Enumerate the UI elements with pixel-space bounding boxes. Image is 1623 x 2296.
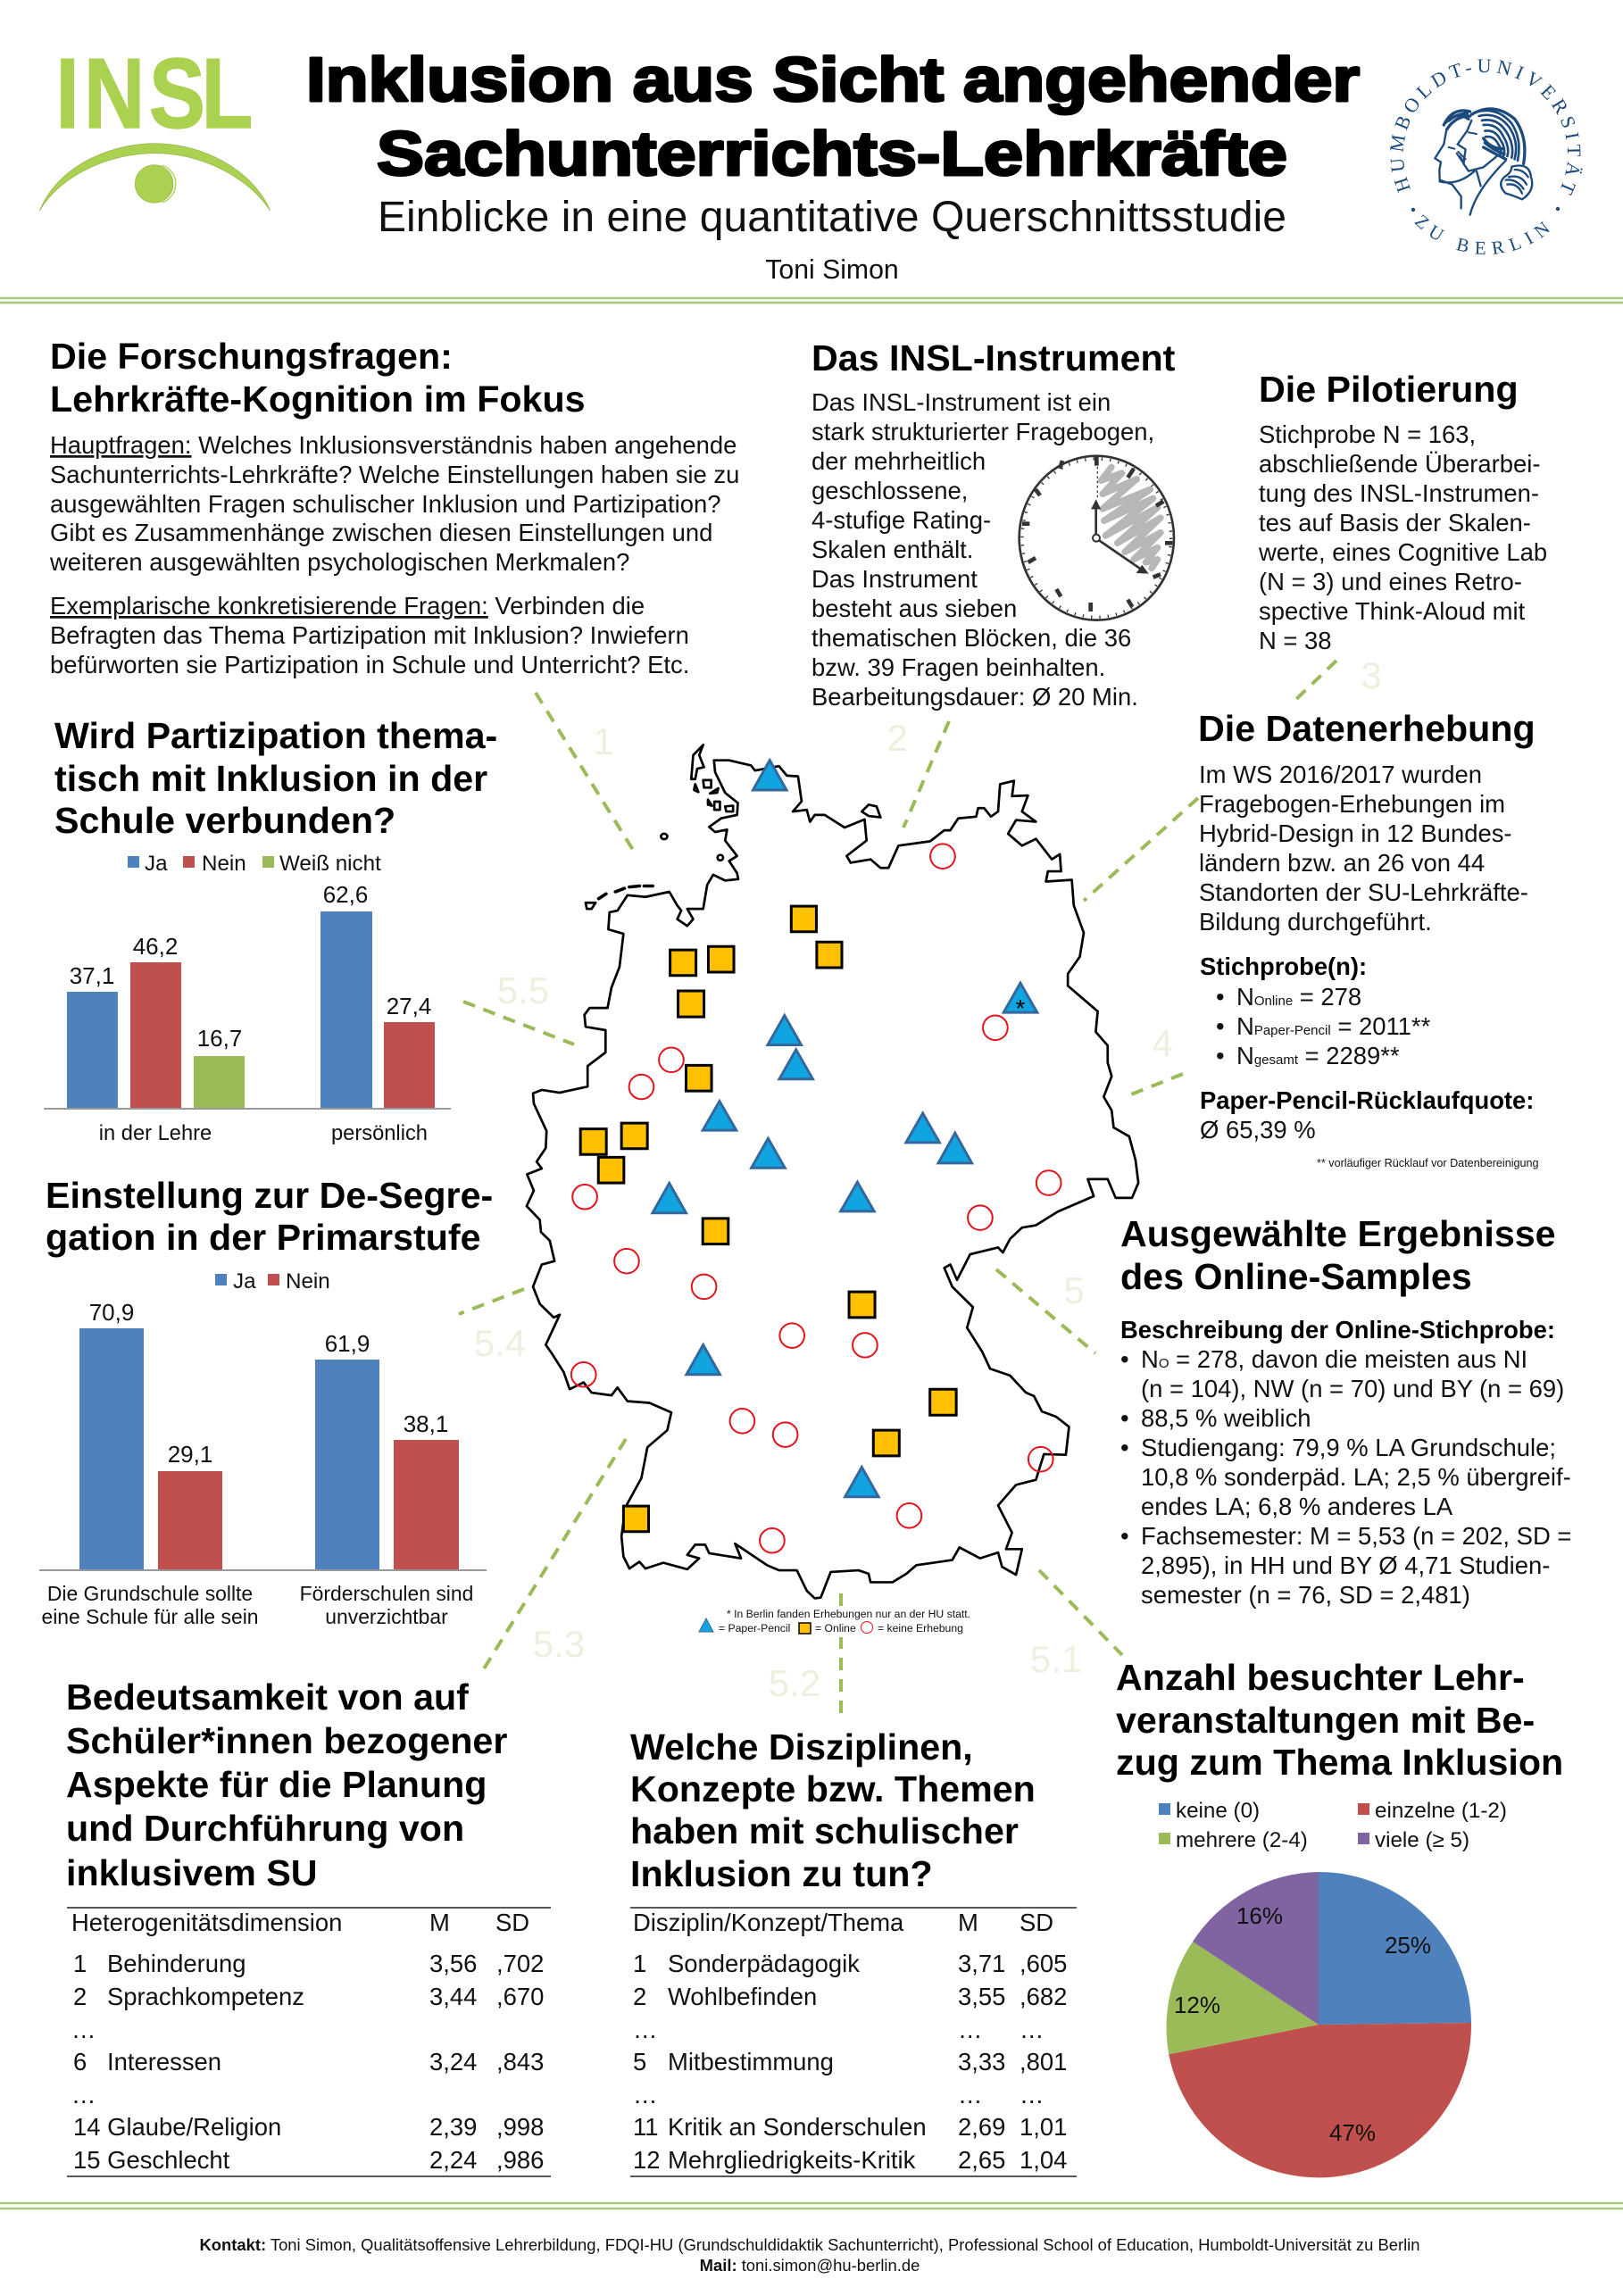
footer: contact: Mail: toni.simon@hu-berlin.de (700, 2256, 920, 2275)
text: Stichprobenbeschreibung: Studiengang: 79,9 % LA Grundschule; (1141, 1434, 1556, 1461)
table: 3,55 (958, 1983, 1005, 2010)
footer: contact (200, 2235, 1419, 2275)
panel: Pilotierung (1258, 369, 1547, 654)
panel: Ausgewählte Ergebnisse (1120, 1213, 1571, 1609)
text: Instrument: 4-stufige Rating- (812, 506, 991, 534)
heading: Ergebnisse: Ausgewählte Ergebnisse (1120, 1213, 1556, 1254)
heading: Bedeutsamkeit: und Durchführung von (66, 1808, 464, 1849)
text: Stichprobenbeschreibung: • (1120, 1345, 1129, 1373)
table: 3,56 (429, 1950, 477, 1977)
table: Sprachkompetenz (107, 1983, 304, 2010)
pie chart (1167, 1872, 1471, 2177)
text: Pilotierung: (N = 3) und eines Retro- (1259, 568, 1522, 595)
leader lines and section numbers: 5.1 (1030, 1638, 1082, 1680)
text: Datenerhebung: Fragebogen-Erhebungen im (1199, 790, 1505, 818)
title: Inklusion aus Sicht angehender (306, 45, 1360, 114)
heading: De-Segregation: Einstellung zur De-Segre- (46, 1175, 493, 1216)
panel: Forschungsfragen (49, 336, 739, 678)
bar chart: 16,7 (197, 1025, 242, 1052)
table: Behinderung (107, 1950, 246, 1977)
table: … (958, 2016, 982, 2043)
text: Stichprobe: NPaper-Pencil = 2011** (1236, 1012, 1431, 1040)
text: Instrument: Das INSL-Instrument ist ein (812, 388, 1111, 416)
text: Instrument: Das Instrument (812, 565, 978, 593)
text: Stichprobe: • (1216, 1012, 1225, 1040)
logo: Humboldt-Universität seal (1390, 59, 1583, 254)
bar chart: eine Schule für alle sein (41, 1605, 259, 1628)
heading: Forschungsfragen: Die Forschungsfragen: (50, 336, 453, 377)
text: Stichprobe: Ngesamt = 2289** (1236, 1042, 1400, 1069)
table: M (429, 1909, 450, 1936)
bar chart: 61,9 (325, 1330, 370, 1357)
table: SD (1020, 1909, 1053, 1936)
table: Mehrgliedrigkeits-Kritik (668, 2146, 916, 2174)
bar chart: Förderschulen sind (300, 1582, 473, 1605)
table: ,682 (1020, 1983, 1067, 2010)
table: 1 (73, 1950, 87, 1977)
table: M (958, 1909, 978, 1936)
table: 2,39 (429, 2113, 477, 2141)
table: 11 (633, 2113, 658, 2141)
panel: Anzahl Lehrveranstaltungen (1116, 1657, 1563, 2177)
text: Instrument: thematischen Blöcken, die 36 (812, 624, 1131, 652)
bar chart: 29,1 (168, 1441, 212, 1468)
heading: Disziplinen: Welche Disziplinen, (630, 1726, 973, 1768)
leader lines and section numbers: 5.2 (769, 1662, 820, 1704)
table: 14 Glaube/Religion (73, 2113, 281, 2141)
heading: De-Segregation: gation in der Primarstufe (46, 1217, 480, 1258)
table: ,702 (496, 1950, 544, 1977)
heading: Forschungsfragen: Lehrkräfte-Kognition im Fokus (50, 379, 586, 420)
pie chart: 47% (1329, 2119, 1376, 2146)
leader lines and section numbers: 2 (886, 717, 908, 759)
bar chart: 70,9 (89, 1299, 134, 1326)
table: ,605 (1020, 1950, 1067, 1977)
map legend: * In Berlin fanden Erhebungen nur an der HU statt. (727, 1608, 970, 1620)
table: 2,65 (958, 2146, 1005, 2174)
text: Hauptfragen: Sachunterrichts-Lehrkräfte? Welche Einstellungen haben sie zu (50, 461, 739, 488)
text: Instrument: bzw. 39 Fragen beinhalten. (812, 653, 1105, 681)
text: Pilotierung: N = 38 (1259, 627, 1332, 654)
text: Stichprobenbeschreibung: 2,895), in HH und BY Ø 4,71 Studien- (1141, 1551, 1550, 1579)
legend (215, 1269, 330, 1294)
text: Stichprobenbeschreibung: 88,5 % weiblich (1141, 1404, 1311, 1432)
bar chart: unverzichtbar (325, 1605, 448, 1628)
text: Pilotierung: Stichprobe N = 163, (1259, 420, 1476, 448)
map of Germany with survey sites (527, 745, 1138, 1598)
leader lines and section numbers: 5.3 (533, 1623, 585, 1665)
text: Stichprobe (1200, 953, 1431, 1069)
pie chart: 25% (1385, 1932, 1431, 1959)
legend: Nein (202, 852, 246, 876)
text: Instrument: Skalen enthält. (812, 536, 973, 563)
heading: Anzahl: Anzahl besuchter Lehr- (1116, 1657, 1525, 1698)
heading: Bedeutsamkeit: Aspekte für die Planung (66, 1764, 487, 1805)
pie chart: 16% (1236, 1902, 1283, 1929)
text: Stichprobenbeschreibung: NO = 278, davon die meisten aus NI (1141, 1345, 1527, 1373)
text: Stichprobenbeschreibung: • (1120, 1434, 1129, 1461)
map legend (699, 1607, 978, 1637)
table (67, 1908, 551, 2176)
online sites (squares) (580, 906, 956, 1532)
heading: Bedeutsamkeit: Schüler*innen bezogener (66, 1720, 507, 1761)
text: Instrument: besteht aus sieben (812, 595, 1017, 622)
legend: Weiß nicht (279, 852, 381, 876)
map legend: = keine Erhebung (878, 1622, 963, 1635)
table: ,670 (496, 1983, 544, 2010)
legend: viele (≥ 5) (1375, 1828, 1469, 1852)
table: 1,01 (1020, 2113, 1067, 2141)
text: konkretisierende Fragen: Exemplarische konkretisierende Fragen: Verbinden die (50, 592, 645, 620)
text: Hauptfragen: ausgewählten Fragen schulischer Inklusion und Partizipation? (50, 490, 721, 518)
table: 3,33 (958, 2048, 1005, 2076)
table: Kritik an Sonderschulen (668, 2113, 927, 2141)
table: Wohlbefinden (668, 1983, 817, 2010)
table (630, 1908, 1077, 2176)
table: 3,44 (429, 1983, 477, 2010)
text: Datenerhebung: ländern bzw. an 26 von 44 (1199, 849, 1485, 877)
table: 5 (633, 2048, 646, 2076)
legend: Nein (286, 1269, 330, 1294)
text: Stichprobe: Stichprobe(n): (1200, 953, 1367, 980)
heading: Anzahl: veranstaltungen mit Be- (1116, 1700, 1535, 1741)
sites without survey (circles) (571, 844, 1061, 1553)
leader lines and section numbers: 5 (1063, 1269, 1085, 1311)
title: Sachunterrichts-Lehrkräfte (377, 119, 1287, 188)
table: … (71, 2081, 96, 2109)
table: … (633, 2016, 657, 2043)
heading: Datenerhebung: Die Datenerhebung (1198, 708, 1536, 749)
text: Hauptfragen: Gibt es Zusammenhänge zwischen diesen Einstellungen und (50, 519, 712, 546)
bar chart: persönlich (331, 1122, 428, 1145)
text: Stichprobe: • (1216, 1042, 1225, 1069)
panel: De-Segregation (39, 1175, 493, 1628)
header divider (0, 298, 1623, 303)
text: Datenerhebung: Hybrid-Design in 12 Bundes- (1199, 819, 1512, 847)
legend: Ja (233, 1269, 256, 1294)
table: … (958, 2081, 982, 2109)
text: Pilotierung: tes auf Basis der Skalen- (1259, 509, 1531, 537)
heading: Disziplinen: Inklusion zu tun? (630, 1853, 933, 1894)
footer divider (0, 2203, 1623, 2209)
table: SD (495, 1909, 529, 1936)
table: 12 (633, 2146, 661, 2174)
footnote: ** vorläufiger Rücklauf vor Datenbereinigung (1317, 1157, 1539, 1169)
heading: Disziplinen: haben mit schulischer (630, 1810, 1019, 1851)
text: Stichprobenbeschreibung: • (1120, 1522, 1129, 1550)
heading: Bedeutsamkeit: inklusivem SU (66, 1852, 318, 1893)
heading: Disziplinen: Konzepte bzw. Themen (630, 1768, 1036, 1809)
text: Instrument: geschlossene, (812, 477, 968, 504)
table: Sonderpädagogik (668, 1950, 860, 1977)
author: Toni Simon (765, 255, 899, 285)
text: Instrument: der mehrheitlich (812, 447, 986, 475)
text: Datenerhebung: Standorten der SU-Lehrkräfte- (1199, 878, 1528, 906)
text: Stichprobenbeschreibung: Beschreibung der Online-Stichprobe: (1120, 1316, 1555, 1343)
table: 2 (633, 1983, 646, 2010)
text: Datenerhebung: Im WS 2016/2017 wurden (1199, 761, 1482, 788)
title (306, 45, 1360, 188)
legend: einzelne (1-2) (1375, 1799, 1507, 1823)
table: … (1020, 2016, 1044, 2043)
text: Hauptfragen: weiteren ausgewählten psychologischen Merkmalen? (49, 548, 629, 576)
heading: Anzahl: zug zum Thema Inklusion (1116, 1742, 1563, 1783)
legend: mehrere (2-4) (1176, 1828, 1308, 1852)
panel: Partizipation (44, 715, 497, 1145)
table: Mitbestimmung (668, 2048, 834, 2076)
text: Stichprobenbeschreibung (1120, 1316, 1571, 1609)
paper-pencil sites (triangles) (653, 761, 1037, 1497)
logo: INSL: INSL (56, 38, 253, 149)
leader lines and section numbers: 5.5 (497, 969, 549, 1011)
panel: Disziplinen (630, 1726, 1077, 2176)
legend: Ja (145, 852, 168, 876)
table: 1 (633, 1950, 646, 1977)
text: Stichprobenbeschreibung: 10,8 % sonderpäd. LA; 2,5 % übergreif- (1141, 1463, 1571, 1491)
subtitle: Einblicke in eine quantitative Querschnittsstudie (378, 194, 1286, 241)
table: 3,24 (429, 2048, 477, 2076)
text: Instrument: Bearbeitungsdauer: Ø 20 Min. (812, 683, 1138, 711)
bar chart: 46,2 (133, 933, 178, 960)
text: konkretisierende Fragen: befürworten sie Partizipation in Schule und Unterricht? Etc. (50, 651, 689, 678)
table: Interessen (107, 2048, 221, 2076)
map legend: = Online (815, 1622, 856, 1635)
map legend: = Paper-Pencil (719, 1622, 790, 1635)
text: Stichprobe: NOnline = 278 (1236, 983, 1361, 1011)
table: … (71, 2016, 96, 2043)
panel: Datenerhebung (1198, 708, 1539, 1169)
text: Pilotierung: tung des INSL-Instrumen- (1259, 479, 1539, 507)
table: ,986 (496, 2146, 544, 2174)
table: 15 Geschlecht (73, 2146, 230, 2174)
heading: Partizipation: Wird Partizipation thema- (54, 715, 497, 756)
bar chart: 37,1 (70, 962, 114, 989)
text: Instrument: stark strukturierter Fragebogen, (812, 418, 1154, 445)
table: ,998 (496, 2113, 544, 2141)
leader lines and section numbers (459, 654, 1382, 1714)
table: 6 (73, 2048, 87, 2076)
text: Rücklaufquote: Paper-Pencil-Rücklaufquote: (1200, 1086, 1534, 1114)
text: Pilotierung: abschließende Überarbei- (1259, 450, 1541, 478)
text: Stichprobenbeschreibung: • (1120, 1404, 1129, 1432)
text: Rücklaufquote (1200, 1086, 1534, 1144)
text: konkretisierende Fragen: Befragten das Thema Partizipation mit Inklusion? Inwiefern (50, 621, 689, 649)
footer: contact: Kontakt: Toni Simon, Qualitätsoffensive Lehrerbildung, FDQI-HU (Grundschuldidaktik Sachunterricht), Professional School of Education, Humboldt-Universität zu Berlin (200, 2235, 1419, 2254)
table: Heterogenitätsdimension (71, 1909, 342, 1936)
logo: INSL (39, 38, 270, 211)
bar chart: in der Lehre (99, 1122, 212, 1145)
text: Datenerhebung: Bildung durchgeführt. (1199, 908, 1432, 936)
table: ,801 (1020, 2048, 1067, 2076)
heading: Pilotierung: Die Pilotierung (1259, 369, 1519, 410)
table: 2,69 (958, 2113, 1005, 2141)
marker: Berlin asterisk: * (1016, 994, 1026, 1022)
text: Pilotierung: spective Think-Aloud mit (1259, 597, 1526, 625)
table: Disziplin/Konzept/Thema (633, 1909, 904, 1936)
text: Stichprobenbeschreibung: (n = 104), NW (n = 70) und BY (n = 69) (1141, 1375, 1564, 1402)
legend (1159, 1799, 1507, 1852)
heading: Ergebnisse: des Online-Samples (1120, 1256, 1472, 1297)
table: 2,24 (429, 2146, 477, 2174)
heading: Bedeutsamkeit: Bedeutsamkeit von auf (66, 1676, 469, 1718)
table: ,843 (496, 2048, 544, 2076)
pie chart: 12% (1174, 1992, 1220, 2018)
table: 1,04 (1020, 2146, 1067, 2174)
text: Hauptfragen: Hauptfragen: Welches Inklusionsverständnis haben angehende (50, 431, 737, 459)
text: Stichprobenbeschreibung: endes LA; 6,8 % anderes LA (1141, 1493, 1453, 1520)
heading: INSL-Instrument: Das INSL-Instrument (812, 337, 1176, 379)
bar chart: 62,6 (323, 881, 368, 908)
text: Stichprobe: • (1216, 983, 1225, 1011)
text: Stichprobenbeschreibung: semester (n = 76, SD = 2,481) (1141, 1581, 1470, 1609)
table: … (633, 2081, 657, 2109)
text: Rücklaufquote: Ø 65,39 % (1200, 1116, 1316, 1144)
table: 2 (73, 1983, 87, 2010)
bar chart (39, 1299, 487, 1628)
bar chart: 38,1 (404, 1410, 448, 1437)
heading: Partizipation: Schule verbunden? (54, 800, 395, 841)
bar chart (44, 881, 451, 1145)
leader lines and section numbers: 5.4 (474, 1322, 526, 1364)
bar chart: 27,4 (387, 993, 431, 1019)
text: Pilotierung: werte, eines Cognitive Lab (1258, 538, 1547, 566)
legend (128, 852, 381, 876)
logo: Humboldt-Universität seal: ZU BERLIN (1414, 214, 1550, 254)
text: Stichprobenbeschreibung: Fachsemester: M = 5,53 (n = 202, SD = (1141, 1522, 1571, 1550)
legend: keine (0) (1176, 1799, 1260, 1823)
panel: Bedeutsamkeit (66, 1676, 551, 2176)
leader lines and section numbers: 4 (1152, 1022, 1173, 1064)
bar chart: Die Grundschule sollte (47, 1582, 253, 1605)
leader lines and section numbers: 1 (593, 720, 614, 762)
heading: Partizipation: tisch mit Inklusion in der (54, 758, 487, 799)
table: … (1020, 2081, 1044, 2109)
leader lines and section numbers: 3 (1361, 654, 1382, 696)
logo: Humboldt-Universität seal: HUMBOLDT-UNIVERSITÄT (1390, 59, 1583, 195)
panel: INSL-Instrument (812, 337, 1176, 711)
table: 3,71 (958, 1950, 1005, 1977)
map outline (527, 745, 1138, 1598)
icon: clock (1020, 456, 1174, 620)
